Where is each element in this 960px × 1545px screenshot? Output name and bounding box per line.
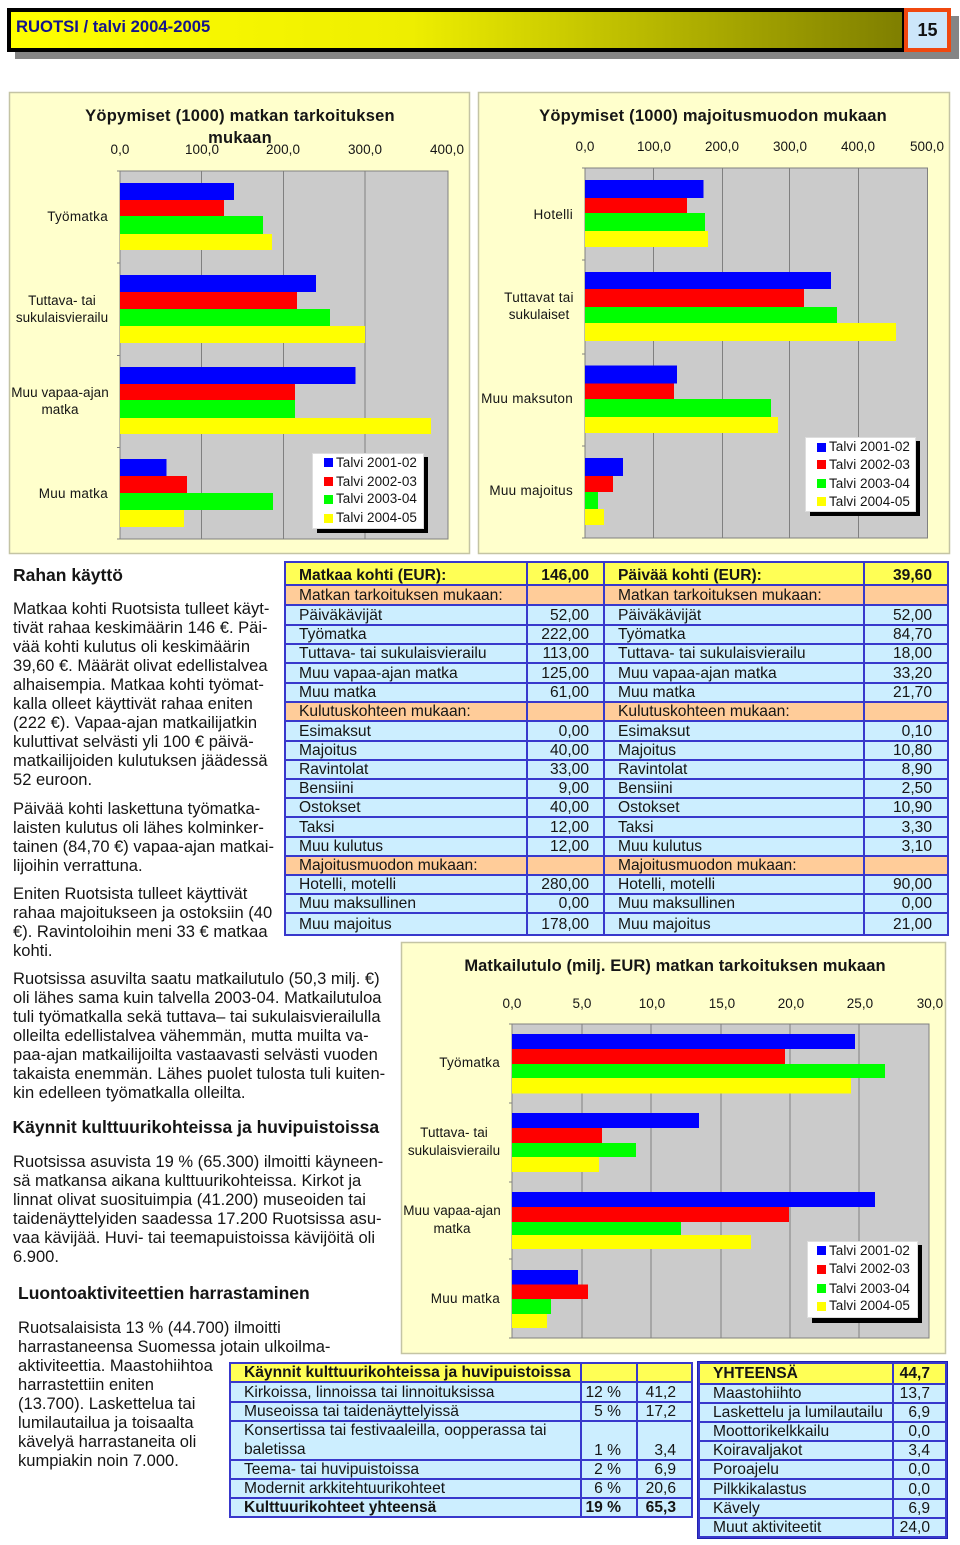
category labels: Työmatka <box>439 1055 500 1070</box>
category labels: Tuttava- tai <box>28 293 96 308</box>
table: nature activities: Pilkkikalastus <box>713 1480 807 1498</box>
table: spending per trip and per day: 90,00 <box>893 876 932 893</box>
category labels: Muu matka <box>39 486 108 501</box>
text block: spending per trip: 39,60 €. Määrät olivat edellistalvea <box>13 656 268 675</box>
table: spending per trip and per day: Muu kulutus <box>618 838 702 855</box>
axis tick labels <box>503 996 943 1011</box>
table: spending per trip and per day: Tuttava- tai sukulaisvierailu <box>618 645 806 662</box>
text block: spending per day <box>13 799 274 875</box>
text block: accommodation and shopping: rahaa majoitukseen ja ostoksiin (40 <box>13 903 272 922</box>
text block: spending per trip <box>13 599 269 789</box>
bars: Muu matka <box>120 459 273 527</box>
table: spending per trip and per day: 33,00 <box>550 761 589 778</box>
table: spending per trip and per day: Matkan tarkoituksen mukaan: <box>299 586 503 604</box>
table: spending per trip and per day: Taksi <box>618 818 654 836</box>
table: cultural site visits: 1 % <box>594 1442 621 1459</box>
table: spending per trip and per day: 2,50 <box>902 780 932 797</box>
table: spending per trip and per day: 52,00 <box>893 606 932 624</box>
page number box <box>904 8 951 52</box>
axis tick labels: 300,0 <box>348 142 382 157</box>
legend: Talvi 2001-02 <box>336 455 417 470</box>
text block: accommodation and shopping <box>13 884 272 960</box>
table: cultural site visits: 17,2 <box>646 1403 676 1420</box>
axis tick labels: 100,0 <box>637 139 671 154</box>
table: spending per trip and per day: Päiväkävijät <box>299 606 382 624</box>
axis tick labels: 400,0 <box>430 142 464 157</box>
text block: nature activities: (13.700). Laskettelua tai <box>18 1394 195 1413</box>
text block: cultural visits: sä matkansa aikana kulttuurikohteissa. Kirkot ja <box>13 1171 361 1190</box>
category labels: sukulaiset <box>509 307 569 322</box>
table: spending per trip and per day: 113,00 <box>542 645 589 662</box>
table: cultural site visits: baletissa <box>244 1440 306 1458</box>
header title bar <box>7 8 906 52</box>
category labels: Tuttava- tai <box>420 1125 488 1140</box>
category labels: matka <box>41 402 79 417</box>
text block: tourism income: kin edelleen työmatkalla olleilta. <box>13 1083 246 1102</box>
table: nature activities: Maastohiihto <box>713 1385 801 1402</box>
table: nature activities: YHTEENSÄ <box>713 1365 798 1382</box>
table: spending per trip and per day: 3,30 <box>902 818 932 836</box>
text block: tourism income <box>13 969 385 1102</box>
table: spending per trip and per day: Hotelli, motelli <box>618 876 715 893</box>
legend <box>806 438 920 516</box>
table: cultural site visits: Modernit arkkitehtuurikohteet <box>244 1480 445 1497</box>
table: spending per trip and per day: Ostokset <box>299 799 361 816</box>
table: spending per trip and per day: 222,00 <box>541 626 589 643</box>
table: cultural site visits: 12 % <box>585 1384 621 1400</box>
category labels: Muu vapaa-ajan <box>403 1203 501 1218</box>
text block: nature activities <box>18 1318 330 1470</box>
table: spending per trip and per day: 84,70 <box>893 626 932 643</box>
category labels <box>481 207 574 498</box>
text block: accommodation and shopping: Eniten Ruotsista tulleet käyttivät <box>13 884 247 903</box>
text block: spending per trip: vää kohti kulutus oli keskimäärin <box>13 637 250 656</box>
text block: nature activities: harrastaneensa Suomessa jotain ulkoilma- <box>18 1337 330 1356</box>
category labels <box>403 1055 501 1306</box>
table: cultural site visits: 5 % <box>594 1403 621 1420</box>
legend <box>808 1242 922 1323</box>
table: spending per trip and per day: Muu matka <box>618 684 695 701</box>
table: spending per trip and per day: Kulutuskohteen mukaan: <box>618 703 790 720</box>
text block: cultural visits: linnat olivat suosituimpia (41.200) museoiden tai <box>13 1190 366 1209</box>
table: spending per trip and per day: 3,10 <box>902 838 932 855</box>
table: nature activities: Kävely <box>713 1500 760 1517</box>
table: spending per trip and per day: Matkaa kohti (EUR): <box>299 567 446 584</box>
table: spending per trip and per day: 61,00 <box>550 684 589 701</box>
table: spending per trip and per day: 0,10 <box>902 722 932 740</box>
table: nature activities: Moottorikelkkailu <box>713 1423 829 1440</box>
table: spending per trip and per day: 0,00 <box>559 895 589 912</box>
table: spending per trip and per day: Majoitus <box>618 742 676 759</box>
heading: Luontoaktiviteettien harrastaminen: Luontoaktiviteettien harrastaminen <box>18 1283 310 1303</box>
table: nature activities: Poroajelu <box>713 1461 779 1478</box>
table: spending per trip and per day: Esimaksut <box>299 722 371 740</box>
heading: Käynnit kulttuurikohteissa ja huvipuistoissa: Käynnit kulttuurikohteissa ja huvipuistoissa <box>12 1117 379 1137</box>
table: spending per trip and per day: Muu maksullinen <box>299 895 416 912</box>
heading: Rahan käyttö: Rahan käyttö <box>13 565 123 585</box>
text block: nature activities: kävelyä harrastaneita oli <box>18 1432 196 1451</box>
table: spending per trip and per day: Bensiini <box>618 780 673 797</box>
table: spending per trip and per day: 10,90 <box>893 799 932 816</box>
table: cultural site visits: 2 % <box>594 1461 621 1478</box>
table: spending per trip and per day: Majoitus <box>299 742 357 759</box>
axis tick labels: 5,0 <box>573 996 591 1011</box>
table: nature activities: 6,9 <box>908 1500 930 1517</box>
legend: Talvi 2004-05 <box>829 494 910 509</box>
bars: Muu matka <box>512 1270 588 1328</box>
legend: Talvi 2003-04 <box>829 476 910 491</box>
table: spending per trip and per day: Esimaksut <box>618 722 690 740</box>
axis tick labels: 0,0 <box>503 996 521 1011</box>
axis tick labels: 25,0 <box>847 996 873 1011</box>
text block: tourism income: takaista enemmän. Lähes puolet tulosta tuli kuiten- <box>13 1064 385 1083</box>
bars: Työmatka <box>120 183 272 250</box>
text block: spending per trip: alhaisempia. Matkaa kohti työmat- <box>13 675 264 694</box>
table: spending per trip and per day: Muu majoitus <box>618 916 711 932</box>
text block: tourism income: olleilta edellistalvea vähemmän, mutta muilta va- <box>13 1026 369 1045</box>
plot area <box>509 1024 929 1338</box>
table: nature activities: Laskettelu ja lumilautailu <box>713 1404 883 1421</box>
table: spending per trip and per day: 10,80 <box>893 742 932 759</box>
table: spending per trip and per day: Muu vapaa-ajan matka <box>618 664 777 682</box>
category labels: Hotelli <box>534 207 573 222</box>
axis tick labels: 0,0 <box>576 139 594 154</box>
table: cultural site visits: 65,3 <box>646 1499 676 1516</box>
table: spending per trip and per day: Bensiini <box>299 780 354 797</box>
text block: spending per trip: kalla olleet käyttivät rahaa eniten <box>13 694 253 713</box>
text block: accommodation and shopping: €). Ravintoloihin meni 33 € matkaa <box>13 922 268 941</box>
text block: spending per trip: 52 euroon. <box>13 770 92 789</box>
table: nature activities: 0,0 <box>908 1480 930 1498</box>
table: spending per trip and per day: 40,00 <box>550 742 589 759</box>
category labels <box>11 209 109 501</box>
table: spending per trip and per day: Muu kulutus <box>299 838 383 855</box>
table: cultural site visits: Teema- tai huvipuistoissa <box>244 1461 419 1478</box>
category labels: Muu maksuton <box>481 391 573 406</box>
table: spending per trip and per day: 125,00 <box>541 664 589 682</box>
category labels: sukulaisvierailu <box>408 1143 500 1158</box>
plot area <box>582 168 928 538</box>
bars: Muu maksuton <box>585 366 778 433</box>
axis tick labels: 15,0 <box>709 996 735 1011</box>
category labels: Muu matka <box>431 1291 500 1306</box>
bars: Tuttava- tai sukulaisvierailu <box>120 275 365 343</box>
bars: Tuttavat tai sukulaiset <box>585 272 896 341</box>
bars: Muu vapaa-ajan matka <box>512 1192 875 1249</box>
text block: spending per day: Päivää kohti laskettuna työmatka- <box>13 799 260 818</box>
table: spending per trip and per day: 33,20 <box>893 664 932 682</box>
table: nature activities: Muut aktiviteetit <box>713 1519 821 1536</box>
table: cultural site visits: 3,4 <box>654 1442 676 1459</box>
legend: Talvi 2001-02 <box>829 439 910 454</box>
table: nature activities: 44,7 <box>900 1365 930 1382</box>
text block: cultural visits: taidenäyttelyiden saadessa 17.200 Ruotsissa asu- <box>13 1209 382 1228</box>
table: spending per trip and per day: 178,00 <box>541 916 589 932</box>
table: spending per trip and per day: Muu vapaa-ajan matka <box>299 664 458 682</box>
table: spending per trip and per day: Muu maksullinen <box>618 895 735 912</box>
table: spending per trip and per day: Muu majoitus <box>299 916 392 932</box>
chart title: Yöpymiset (1000) majoitusmuodon mukaan <box>539 107 887 125</box>
table: spending per trip and per day: 21,00 <box>893 916 932 932</box>
table: cultural site visits: 41,2 <box>646 1384 676 1400</box>
header title: RUOTSI / talvi 2004-2005 <box>16 17 210 36</box>
text block: cultural visits: vaa kävijää. Huvi- tai teemapuistoissa kävijöitä oli <box>13 1228 375 1247</box>
legend: Talvi 2004-05 <box>829 1298 910 1313</box>
legend: Talvi 2002-03 <box>829 1261 910 1276</box>
text block: spending per day: tainen (84,70 €) vapaa-ajan matkai- <box>13 837 274 856</box>
axis tick labels <box>111 142 464 157</box>
legend: Talvi 2003-04 <box>336 491 417 506</box>
text block: nature activities: aktiviteettia. Maastohiihtoa <box>18 1356 213 1375</box>
header shadow <box>15 16 959 59</box>
table: spending per trip and per day: 9,00 <box>559 780 589 797</box>
chart title <box>85 107 395 147</box>
axis tick labels: 30,0 <box>917 996 943 1011</box>
table: spending per trip and per day: 52,00 <box>550 606 589 624</box>
table: cultural site visits: 20,6 <box>646 1480 676 1497</box>
table: nature activities: Koiravaljakot <box>713 1442 802 1459</box>
legend <box>312 454 428 533</box>
text block: spending per trip: (222 €). Vapaa-ajan matkailijatkin <box>13 713 257 732</box>
table: spending per trip and per day: 12,00 <box>550 838 589 855</box>
table: spending per trip and per day: Päivää kohti (EUR): <box>618 567 762 584</box>
axis tick labels: 0,0 <box>111 142 129 157</box>
table: nature activities: 6,9 <box>908 1404 930 1421</box>
bars: Tuttava- tai sukulaisvierailu <box>512 1113 699 1172</box>
table: cultural site visits: Konsertissa tai festivaaleilla, oopperassa tai <box>244 1422 547 1439</box>
table: spending per trip and per day: Hotelli, motelli <box>299 876 396 893</box>
table: spending per trip and per day: Päiväkävijät <box>618 606 701 624</box>
axis tick labels: 100,0 <box>185 142 219 157</box>
table: spending per trip and per day: 12,00 <box>550 818 589 836</box>
table: spending per trip and per day: 21,70 <box>893 684 932 701</box>
panel: tourism income chart <box>402 942 946 1354</box>
table: spending per trip and per day: 8,90 <box>902 761 932 778</box>
table: spending per trip and per day: Ostokset <box>618 799 680 816</box>
axis tick labels: 20,0 <box>778 996 804 1011</box>
bars: Hotelli <box>585 180 708 247</box>
legend: Talvi 2002-03 <box>336 474 417 489</box>
axis tick labels: 200,0 <box>266 142 300 157</box>
table: spending per trip and per day: 146,00 <box>541 567 589 584</box>
table: spending per trip and per day: Työmatka <box>299 626 367 643</box>
table: spending per trip and per day: Tuttava- tai sukulaisvierailu <box>299 645 486 662</box>
category labels: matka <box>433 1221 471 1236</box>
category labels: Muu majoitus <box>489 483 573 498</box>
text block: spending per trip: tivät rahaa keskimäärin 146 €. Päi- <box>13 618 268 637</box>
table: spending per trip and per day: Kulutuskohteen mukaan: <box>299 703 471 720</box>
axis tick labels <box>576 139 944 154</box>
table: spending per trip and per day: 39,60 <box>893 567 932 584</box>
table: spending per trip and per day: 0,00 <box>559 722 589 740</box>
text block: spending per trip: kuluttivat selvästi yli 100 € päivä- <box>13 732 254 751</box>
table: spending per trip and per day: Ravintolat <box>618 761 687 778</box>
table: spending per trip and per day: Työmatka <box>618 626 686 643</box>
table: cultural site visits: 19 % <box>585 1499 621 1516</box>
table: nature activities: 24,0 <box>900 1519 930 1536</box>
text block: cultural visits: Ruotsissa asuvista 19 % (65.300) ilmoitti käyneen- <box>13 1152 383 1171</box>
table: nature activities: 13,7 <box>900 1385 930 1402</box>
bars: Työmatka <box>512 1034 885 1094</box>
table: cultural site visits: 6 % <box>594 1480 621 1497</box>
page number box: 15 <box>917 20 938 40</box>
panel: nights by accommodation chart <box>478 92 950 554</box>
legend: Talvi 2004-05 <box>336 510 417 525</box>
table: spending per trip and per day: Ravintolat <box>299 761 368 778</box>
table: cultural site visits: Kirkoissa, linnoissa tai linnoituksissa <box>244 1384 494 1400</box>
legend: Talvi 2002-03 <box>829 457 910 472</box>
text block: tourism income: paa-ajan matkailijoilta vastaavasti selvästi vuoden <box>13 1045 378 1064</box>
table: spending per trip and per day: 0,00 <box>902 895 932 912</box>
bars: Muu majoitus <box>585 458 623 525</box>
text block: nature activities: Ruotsalaisista 13 % (44.700) ilmoitti <box>18 1318 281 1337</box>
table: nature activities: 3,4 <box>908 1442 930 1459</box>
table: spending per trip and per day: Muu matka <box>299 684 376 701</box>
table: spending per trip and per day: 280,00 <box>541 876 589 893</box>
chart title: Yöpymiset (1000) matkan tarkoituksen <box>85 107 395 125</box>
category labels: sukulaisvierailu <box>16 310 108 325</box>
table: spending per trip and per day: 40,00 <box>550 799 589 816</box>
plot area <box>117 171 448 539</box>
table: spending per trip and per day: Majoitusmuodon mukaan: <box>299 857 478 874</box>
table: spending per trip and per day: Majoitusmuodon mukaan: <box>618 857 797 874</box>
text block: spending per day: laisten kulutus oli lähes kolminker- <box>13 818 264 837</box>
text block: spending per trip: Matkaa kohti Ruotsista tulleet käyt- <box>13 599 269 618</box>
bars: Muu vapaa-ajan matka <box>120 367 431 434</box>
text block: cultural visits <box>13 1152 383 1266</box>
text block: nature activities: harrastettiin eniten <box>18 1375 154 1394</box>
legend: Talvi 2001-02 <box>829 1243 910 1258</box>
table: nature activities <box>698 1362 947 1538</box>
table: spending per trip and per day: Matkan tarkoituksen mukaan: <box>618 586 822 604</box>
table: spending per trip and per day: Taksi <box>299 818 335 836</box>
table: cultural site visits: Käynnit kulttuurikohteissa ja huvipuistoissa <box>244 1364 571 1381</box>
text block: tourism income: tuli työmatkalla sekä tuttava– tai sukulaisvierailulla <box>13 1007 381 1026</box>
axis tick labels: 200,0 <box>705 139 739 154</box>
axis tick labels: 400,0 <box>841 139 875 154</box>
text block: tourism income: oli lähes sama kuin talvella 2003-04. Matkailutuloa <box>13 988 382 1007</box>
table: spending per trip and per day <box>284 561 949 936</box>
text block: spending per trip: matkailijoiden kulutuksen jäädessä <box>13 751 268 770</box>
legend: Talvi 2003-04 <box>829 1281 910 1296</box>
chart title: Matkailutulo (milj. EUR) matkan tarkoituksen mukaan <box>464 957 886 975</box>
category labels: Muu vapaa-ajan <box>11 385 109 400</box>
text block: tourism income: Ruotsissa asuvilta saatu matkailutulo (50,3 milj. €) <box>13 969 380 988</box>
table: spending per trip and per day: 18,00 <box>893 645 932 662</box>
text block: accommodation and shopping: kohti. <box>13 941 53 960</box>
text block: cultural visits: 6.900. <box>13 1247 59 1266</box>
table: cultural site visits <box>229 1362 693 1518</box>
category labels: Työmatka <box>47 209 108 224</box>
table: nature activities: 0,0 <box>908 1461 930 1478</box>
axis tick labels: 300,0 <box>773 139 807 154</box>
table: nature activities: 0,0 <box>908 1423 930 1440</box>
table: cultural site visits: Museoissa tai taidenäyttelyissä <box>244 1403 459 1420</box>
text block: nature activities: kumpiakin noin 7.000. <box>18 1451 179 1470</box>
text block: spending per day: lijoihin verrattuna. <box>13 856 143 875</box>
chart title: mukaan <box>208 129 272 147</box>
table: cultural site visits: 6,9 <box>654 1461 676 1478</box>
text block: nature activities: lumilautailua ja toisaalta <box>18 1413 194 1432</box>
category labels: Tuttavat tai <box>504 290 574 305</box>
header banner <box>7 8 959 59</box>
table: cultural site visits: Kulttuurikohteet yhteensä <box>244 1499 436 1516</box>
axis tick labels: 10,0 <box>639 996 665 1011</box>
axis tick labels: 500,0 <box>910 139 944 154</box>
